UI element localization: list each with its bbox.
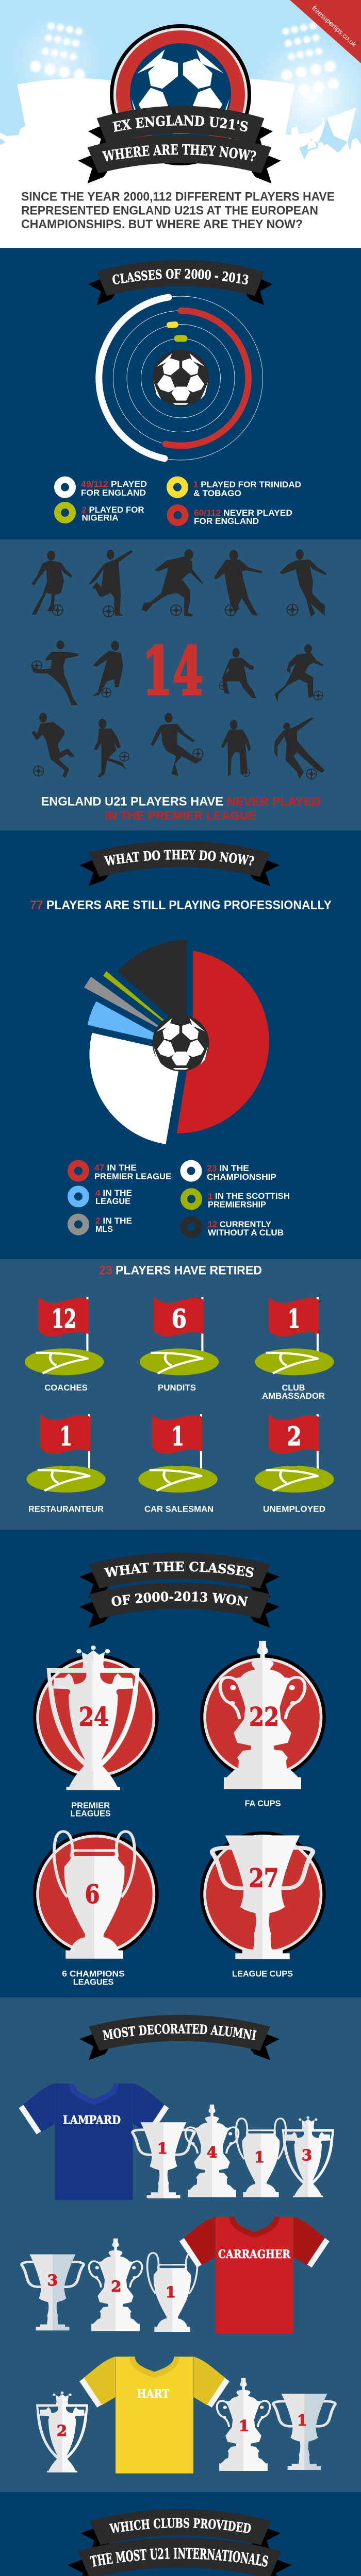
panel: players have retired — [0, 1259, 361, 1530]
ribbon: classes of 2000 - 2013 — [88, 260, 273, 305]
alumnus: lampard — [19, 2083, 334, 2200]
intro text — [21, 190, 335, 231]
trophy: fa cups: 22 — [249, 1701, 279, 1732]
legend: NIGERIA — [81, 513, 119, 523]
ribbon: what the classes — [79, 1552, 280, 1598]
trophy: champions leagues: 6 CHAMPIONS — [62, 1969, 125, 1978]
flag numbers: 2 — [287, 1421, 301, 1451]
alumnus: carragher — [22, 2217, 330, 2333]
corner flags — [25, 1297, 334, 1493]
flag labels: PUNDITS — [158, 1383, 196, 1393]
alumnus: lampard: LAMPARD — [63, 2113, 121, 2127]
trophy: fa cups — [200, 1641, 326, 1808]
intro text: REPRESENTED ENGLAND U21S AT THE EUROPEAN — [21, 204, 318, 217]
flag labels: CAR SALESMAN — [144, 1504, 214, 1514]
football — [153, 1015, 209, 1072]
legend: MLS — [95, 1224, 113, 1234]
heading: retired: 23 PLAYERS HAVE RETIRED — [99, 1263, 262, 1278]
legend: 4 IN THE — [95, 1188, 132, 1198]
panel: classes of 2000 - 2013 — [0, 248, 361, 539]
caption: never played — [41, 794, 321, 823]
ribbon: where are they now — [78, 134, 281, 183]
corner ribbon: freesupertips.co.uk — [310, 4, 358, 48]
legend: 2 PLAYED FOR — [81, 505, 144, 515]
arc: nigeria — [177, 335, 184, 342]
ribbon: what do they do now — [79, 841, 280, 886]
flag labels: CLUB — [282, 1383, 305, 1393]
intro text: SINCE THE YEAR 2000,112 DIFFERENT PLAYERS HAVE — [21, 190, 335, 204]
heading: still playing: 77 PLAYERS ARE STILL PLAYING PROFESSIONALLY — [30, 899, 332, 912]
trophy: premier leagues: 24 — [79, 1701, 109, 1732]
legend: CHAMPIONSHIP — [207, 1172, 276, 1182]
legend: PREMIERSHIP — [208, 1199, 266, 1209]
ribbon: of 2000-2013 won: OF 2000-2013 WON — [111, 1591, 248, 1606]
intro text: CHAMPIONSHIPS. BUT WHERE ARE THEY NOW? — [21, 217, 303, 231]
ribbon: what do they do now: WHAT DO THEY DO NOW? — [104, 850, 254, 866]
flag numbers — [52, 1303, 301, 1451]
alumnus: lampard: 1 — [254, 2148, 265, 2166]
ribbon: ex england u21's — [88, 106, 273, 145]
slice: scottish premiership — [103, 971, 164, 1021]
flag numbers: 6 — [172, 1303, 187, 1334]
alumnus: carragher: 2 — [111, 2278, 121, 2295]
flag labels: AMBASSADOR — [262, 1391, 325, 1401]
flag numbers: 1 — [60, 1421, 72, 1451]
slice: championship — [89, 1033, 178, 1144]
panel: which clubs provided the most internationals — [0, 2492, 361, 2576]
arc: played for england — [99, 297, 169, 459]
caption: never played: ENGLAND U21 PLAYERS HAVE NEVER PLAYED — [41, 794, 321, 809]
alumnus: lampard: 4 — [207, 2143, 217, 2161]
legend: FOR ENGLAND — [194, 516, 259, 526]
flag numbers: 1 — [288, 1303, 300, 1334]
player silhouettes: first row — [31, 549, 326, 617]
trophy: league cups: LEAGUE CUPS — [232, 1969, 293, 1978]
legend: 1 PLAYED FOR TRINIDAD — [193, 480, 301, 489]
ribbon: of 2000-2013 won — [79, 1583, 280, 1628]
corner ribbon — [290, 0, 361, 63]
trophy: fa cups: FA CUPS — [244, 1799, 281, 1808]
flag labels: UNEMPLOYED — [263, 1504, 325, 1514]
slice: mls — [84, 977, 159, 1027]
panel: what do they do now — [0, 831, 361, 1259]
alumnus: hart: 1 — [239, 2417, 249, 2435]
pie chart — [84, 939, 269, 1144]
ribbon: the most u21 internationals: THE MOST U21 INTERNATIONALS — [90, 2548, 268, 2567]
legend: 1 IN THE SCOTTISH — [208, 1191, 290, 1201]
alumnus: lampard: 1 — [157, 2140, 168, 2157]
flag numbers: 12 — [52, 1303, 76, 1334]
alumnus: lampard: 3 — [302, 2146, 312, 2164]
arc: never played for england — [166, 311, 249, 446]
slice: without a club — [118, 939, 187, 1016]
ribbon: which clubs provided — [80, 2509, 281, 2548]
slice: premier league — [177, 951, 269, 1133]
legend: 60/112 NEVER PLAYED — [194, 508, 292, 518]
ribbon: classes of 2000 - 2013: CLASSES OF 2000 - 2013 — [112, 269, 249, 284]
crowd and banner silhouette — [0, 78, 361, 248]
trophy: league cups: 27 — [249, 1862, 279, 1893]
alumnus: hart: 2 — [57, 2422, 67, 2439]
ribbon: ex england u21's: EX ENGLAND U21'S — [112, 115, 248, 132]
legend — [58, 479, 301, 526]
football — [153, 350, 209, 406]
legend: 23 IN THE — [207, 1163, 249, 1173]
panel: header — [0, 0, 361, 231]
legend: 12 CURRENTLY — [208, 1219, 272, 1229]
alumnus: carragher: 1 — [166, 2283, 176, 2301]
player silhouettes: second row — [31, 640, 323, 705]
legend: PREMIER LEAGUE — [94, 1172, 171, 1181]
slice: the league — [88, 1001, 154, 1040]
flag numbers: 1 — [172, 1421, 184, 1451]
legend: 2 IN THE — [95, 1216, 132, 1226]
legend: WITHOUT A CLUB — [208, 1228, 284, 1238]
alumnus: carragher: CARRAGHER — [218, 2248, 291, 2261]
trophy: champions leagues — [33, 1831, 159, 1987]
trophy: premier leagues — [33, 1646, 159, 1818]
trophy: league cups — [200, 1831, 326, 1978]
trophy: premier leagues: LEAGUES — [71, 1808, 111, 1818]
panel: most decorated alumni — [0, 1997, 361, 2492]
alumnus: hart: 1 — [297, 2412, 307, 2429]
legend: LEAGUE — [95, 1196, 130, 1206]
alumnus: hart: HART — [137, 2387, 170, 2401]
legend: 47 IN THE — [94, 1163, 137, 1173]
trophy: champions leagues: LEAGUES — [73, 1977, 113, 1987]
trophy: champions leagues: 6 — [85, 1879, 100, 1909]
legend: 49/112 PLAYED — [81, 479, 147, 489]
legend: FOR ENGLAND — [81, 488, 146, 498]
badge: football crest — [110, 24, 251, 165]
alumnus: carragher: 3 — [47, 2272, 58, 2289]
glow: stadium floodlights — [8, 13, 361, 162]
alumnus: hart — [36, 2357, 335, 2473]
panel: never played in the premier league — [0, 539, 361, 831]
ribbon: the most u21 internationals — [67, 2538, 292, 2576]
flag labels: COACHES — [44, 1383, 88, 1393]
trophy: premier leagues: PREMIER — [71, 1801, 110, 1810]
ribbon: what the classes: WHAT THE CLASSES — [104, 1561, 254, 1578]
player silhouettes: third row — [31, 713, 324, 779]
ribbon: most decorated alumni — [79, 2014, 280, 2060]
panel: what the classes won — [0, 1530, 361, 1997]
flag labels — [28, 1383, 325, 1514]
ribbon: which clubs provided: WHICH CLUBS PROVIDED — [109, 2518, 251, 2533]
number 14: 14 — [142, 633, 203, 709]
orbit chart — [99, 296, 263, 460]
caption: never played: IN THE PREMIER LEAGUE — [105, 809, 256, 823]
ribbon: where are they now: WHERE ARE THEY NOW? — [102, 144, 256, 162]
ribbon: most decorated alumni: MOST DECORATED ALUMNI — [102, 2024, 257, 2040]
legend: & TOBAGO — [193, 488, 241, 498]
legend — [71, 1163, 290, 1238]
flag labels: RESTAURANTEUR — [28, 1504, 104, 1514]
